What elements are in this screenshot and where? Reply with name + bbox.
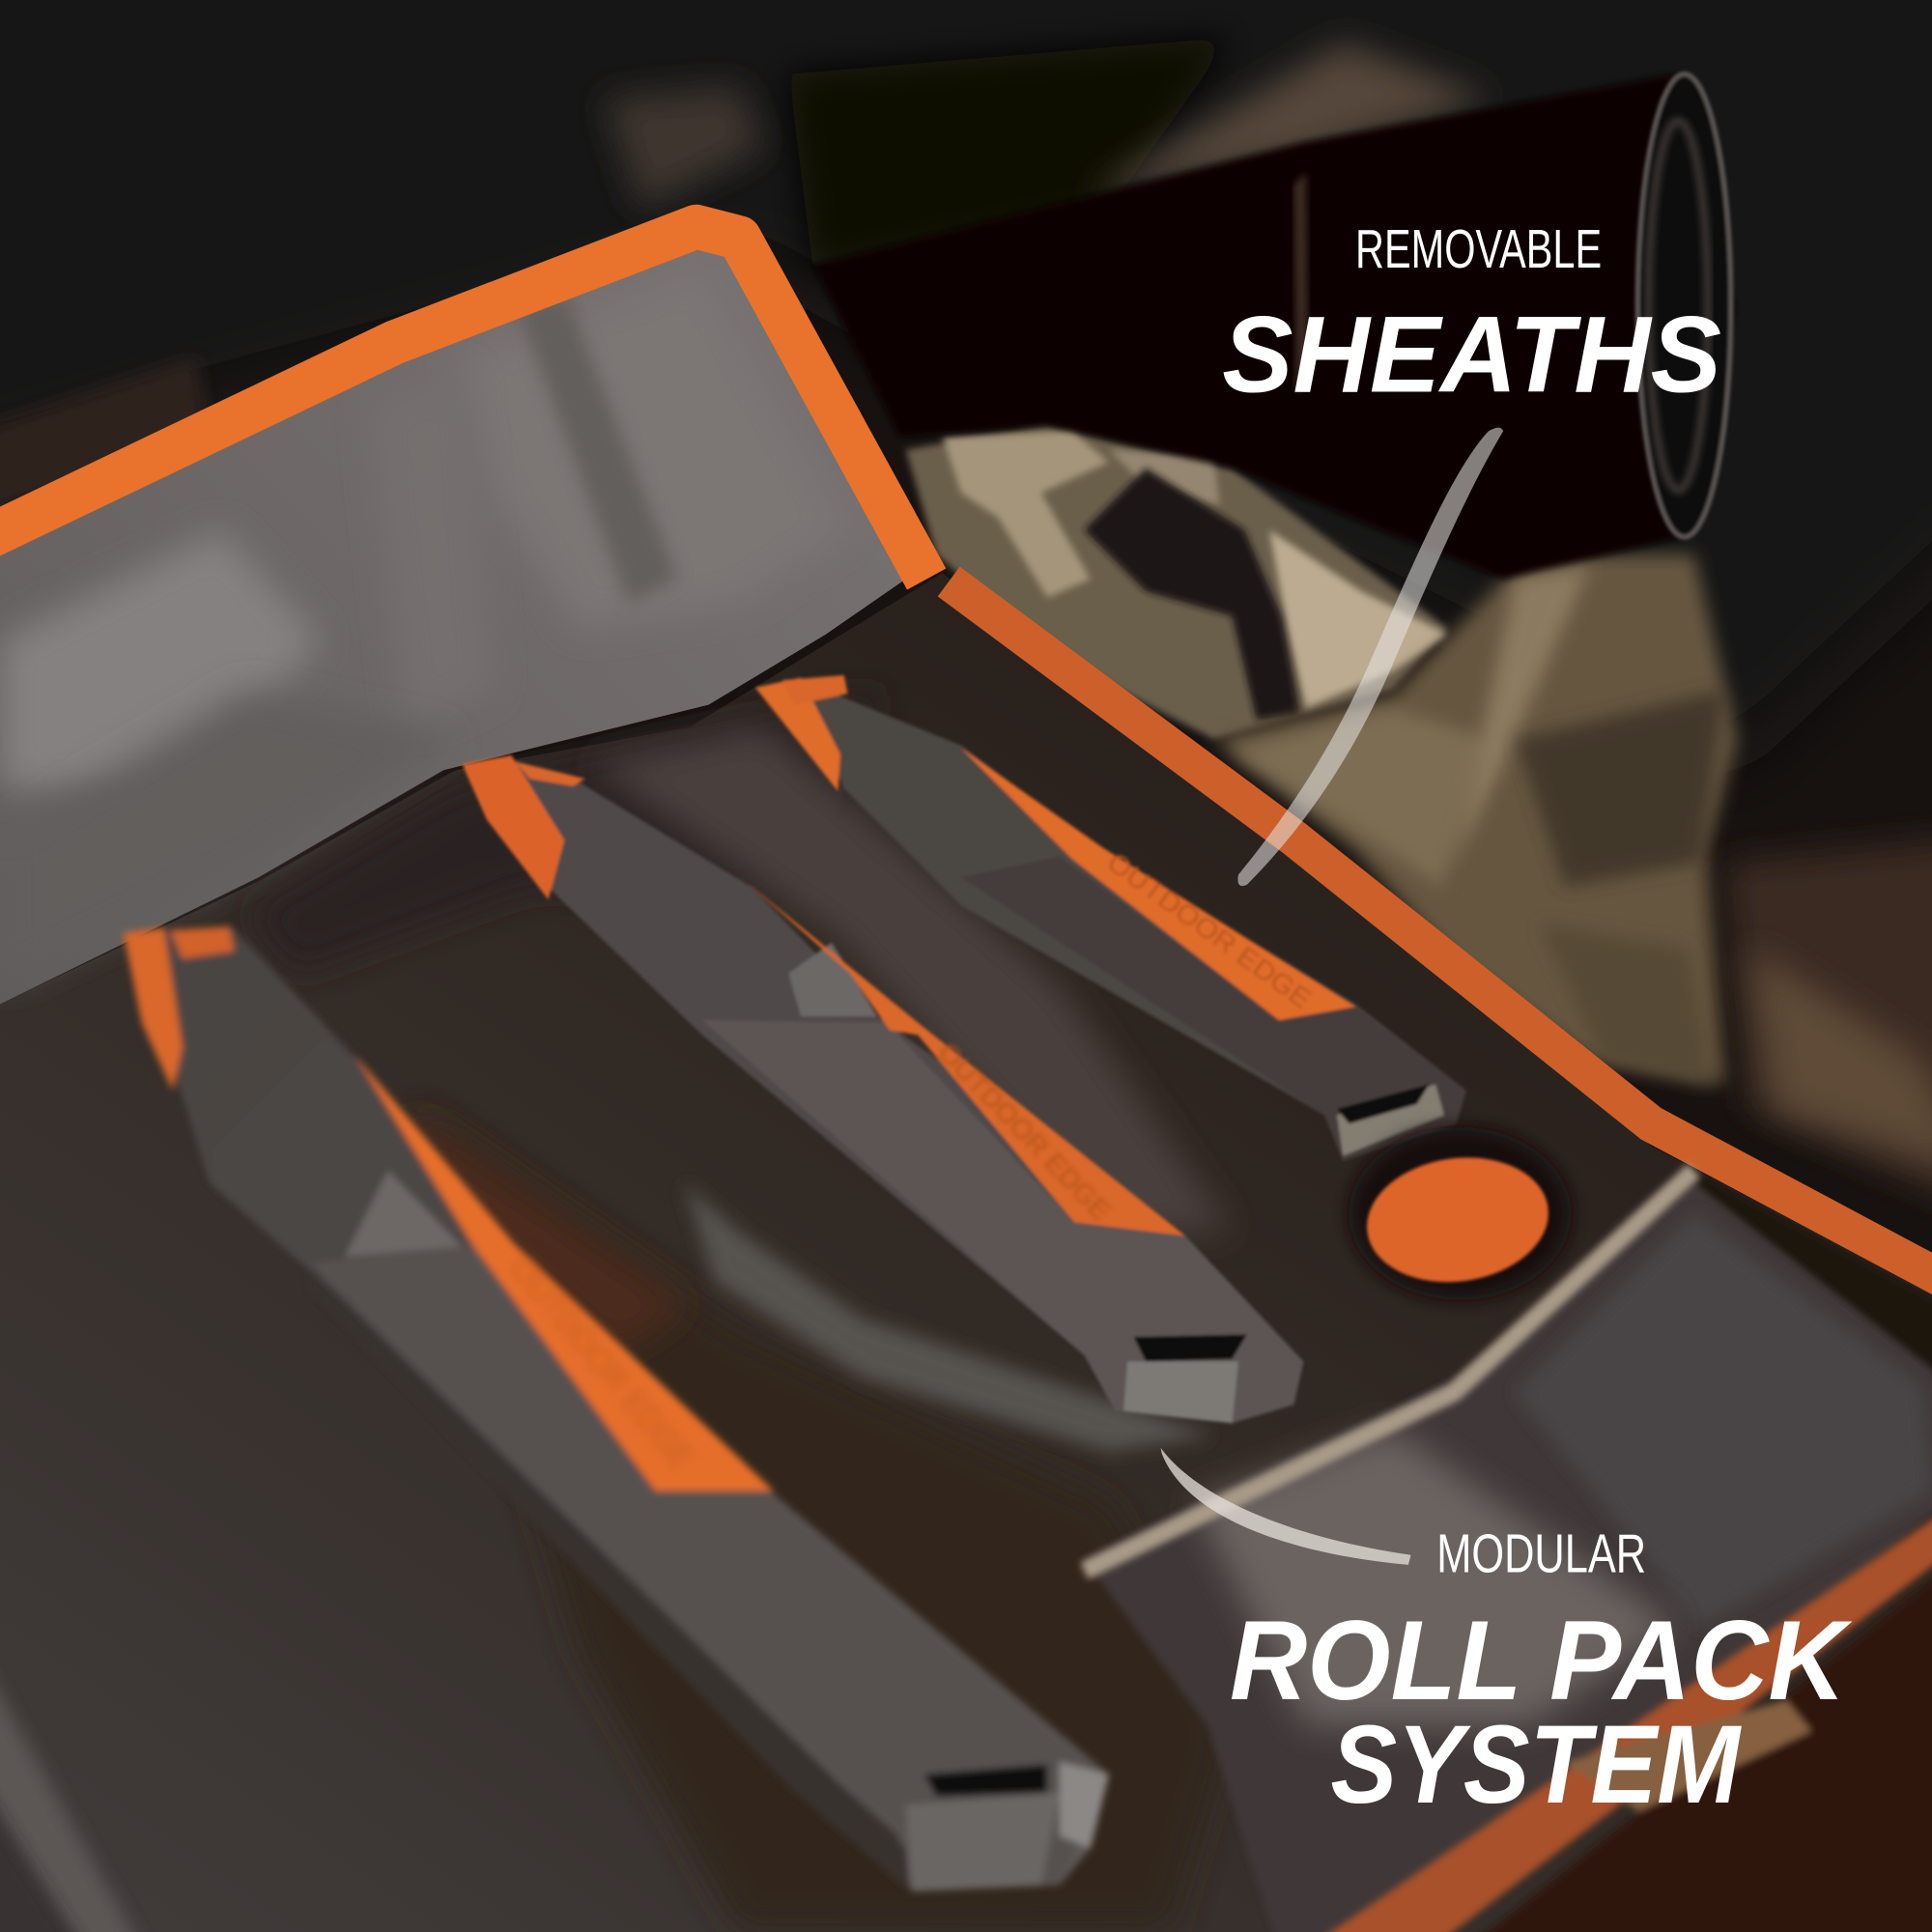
- orange edge binding: [949, 582, 1932, 1282]
- tan gear pile: [1213, 554, 1932, 1208]
- orange cap: [755, 678, 840, 791]
- roll pack base fabric: [0, 573, 1932, 1932]
- knife: middle sheath: [462, 755, 1303, 1423]
- brand mark: OUTDOOR EDGE: [1102, 846, 1317, 1014]
- headline text line one: ROLL PACK: [1230, 1597, 1853, 1723]
- orange snap button: [1350, 1127, 1571, 1300]
- callout: removable sheaths: [1222, 218, 1721, 415]
- label text: REMOVABLE: [1355, 218, 1602, 279]
- headline text line two: SYSTEM: [1331, 1703, 1742, 1827]
- orange cap: [124, 927, 183, 1091]
- orange grip stripe: [747, 882, 1185, 1236]
- dark gap behind binding: [1694, 1171, 1932, 1392]
- headline text: SHEATHS: [1222, 294, 1721, 415]
- arrow: removable sheaths pointer: [1237, 428, 1503, 886]
- orange trim and lower corner: [1319, 1509, 1932, 1932]
- orange cap: [462, 755, 564, 899]
- callout: roll pack system: [1230, 1523, 1853, 1827]
- brand mark: OUTDOOR EDGE: [501, 1249, 701, 1477]
- mesh pocket: [1084, 1171, 1932, 1932]
- brand mark: OUTDOOR EDGE: [932, 1037, 1117, 1226]
- arrow: roll pack pointer: [1161, 1448, 1410, 1565]
- orange grip stripe: [355, 1055, 774, 1491]
- fold-over flap: [0, 227, 926, 1005]
- label text: MODULAR: [1436, 1523, 1646, 1584]
- camouflage fabric: [906, 425, 1448, 739]
- binoculars: [813, 74, 1735, 579]
- orange grip stripe: [961, 748, 1355, 1020]
- knife: front sheath: [124, 926, 1109, 1891]
- knife: back sheath: [755, 675, 1466, 1161]
